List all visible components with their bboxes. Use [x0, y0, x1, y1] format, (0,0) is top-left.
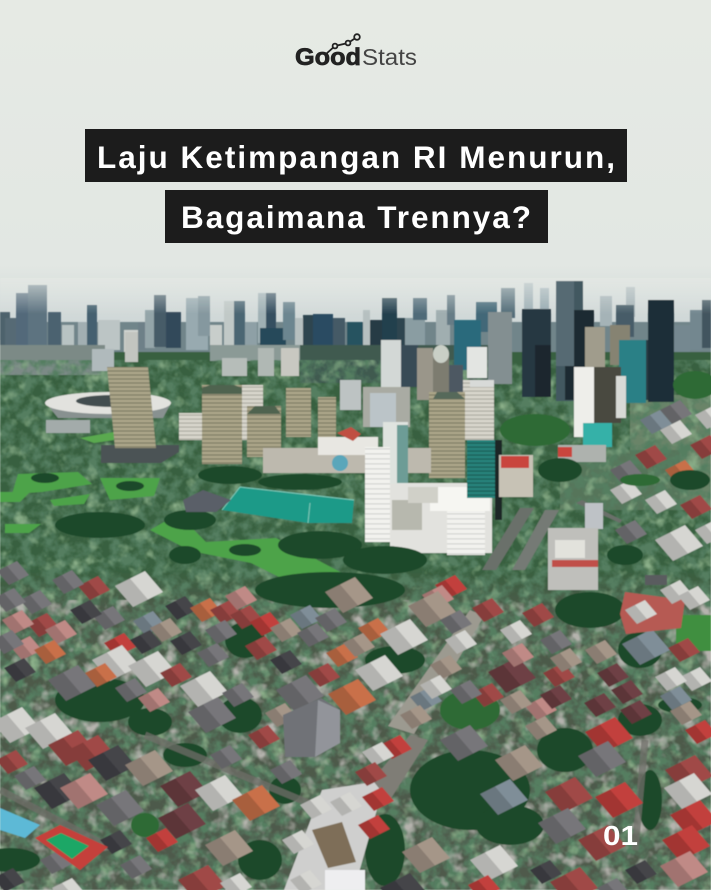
main tower left [101, 367, 179, 463]
golf course [0, 466, 427, 593]
residential tree cover [0, 572, 711, 886]
ground tree texture [0, 360, 711, 890]
mid-right neighbourhood [500, 371, 711, 590]
corridor of dense houses [282, 610, 484, 890]
apartment block [283, 698, 340, 757]
stadium [45, 392, 171, 443]
title line 1 [85, 129, 627, 182]
skyline haze [0, 278, 711, 314]
aerial city photo [0, 278, 711, 890]
road network [0, 735, 645, 850]
roads [482, 500, 622, 570]
shopping mall [263, 427, 492, 555]
page number: 01 [603, 820, 638, 851]
ground base [0, 352, 711, 572]
background sky [0, 0, 711, 340]
house roofs [0, 561, 711, 890]
title line 2 [165, 190, 548, 243]
title line 1: Laju Ketimpangan RI Menurun, [97, 139, 615, 175]
logo wordmark Stats: Stats [362, 44, 417, 70]
logo wordmark Good: Good [295, 44, 361, 71]
white and teal towers [365, 422, 606, 542]
title [85, 129, 627, 243]
beige towers [179, 380, 494, 478]
green netted driving range [183, 487, 354, 523]
logo trend icon [326, 34, 360, 54]
near skyscrapers [92, 281, 674, 447]
far skyline [0, 283, 711, 360]
sports courts [0, 808, 108, 870]
logo: GoodStats [295, 34, 417, 71]
title line 2: Bagaimana Trennya? [181, 199, 531, 235]
